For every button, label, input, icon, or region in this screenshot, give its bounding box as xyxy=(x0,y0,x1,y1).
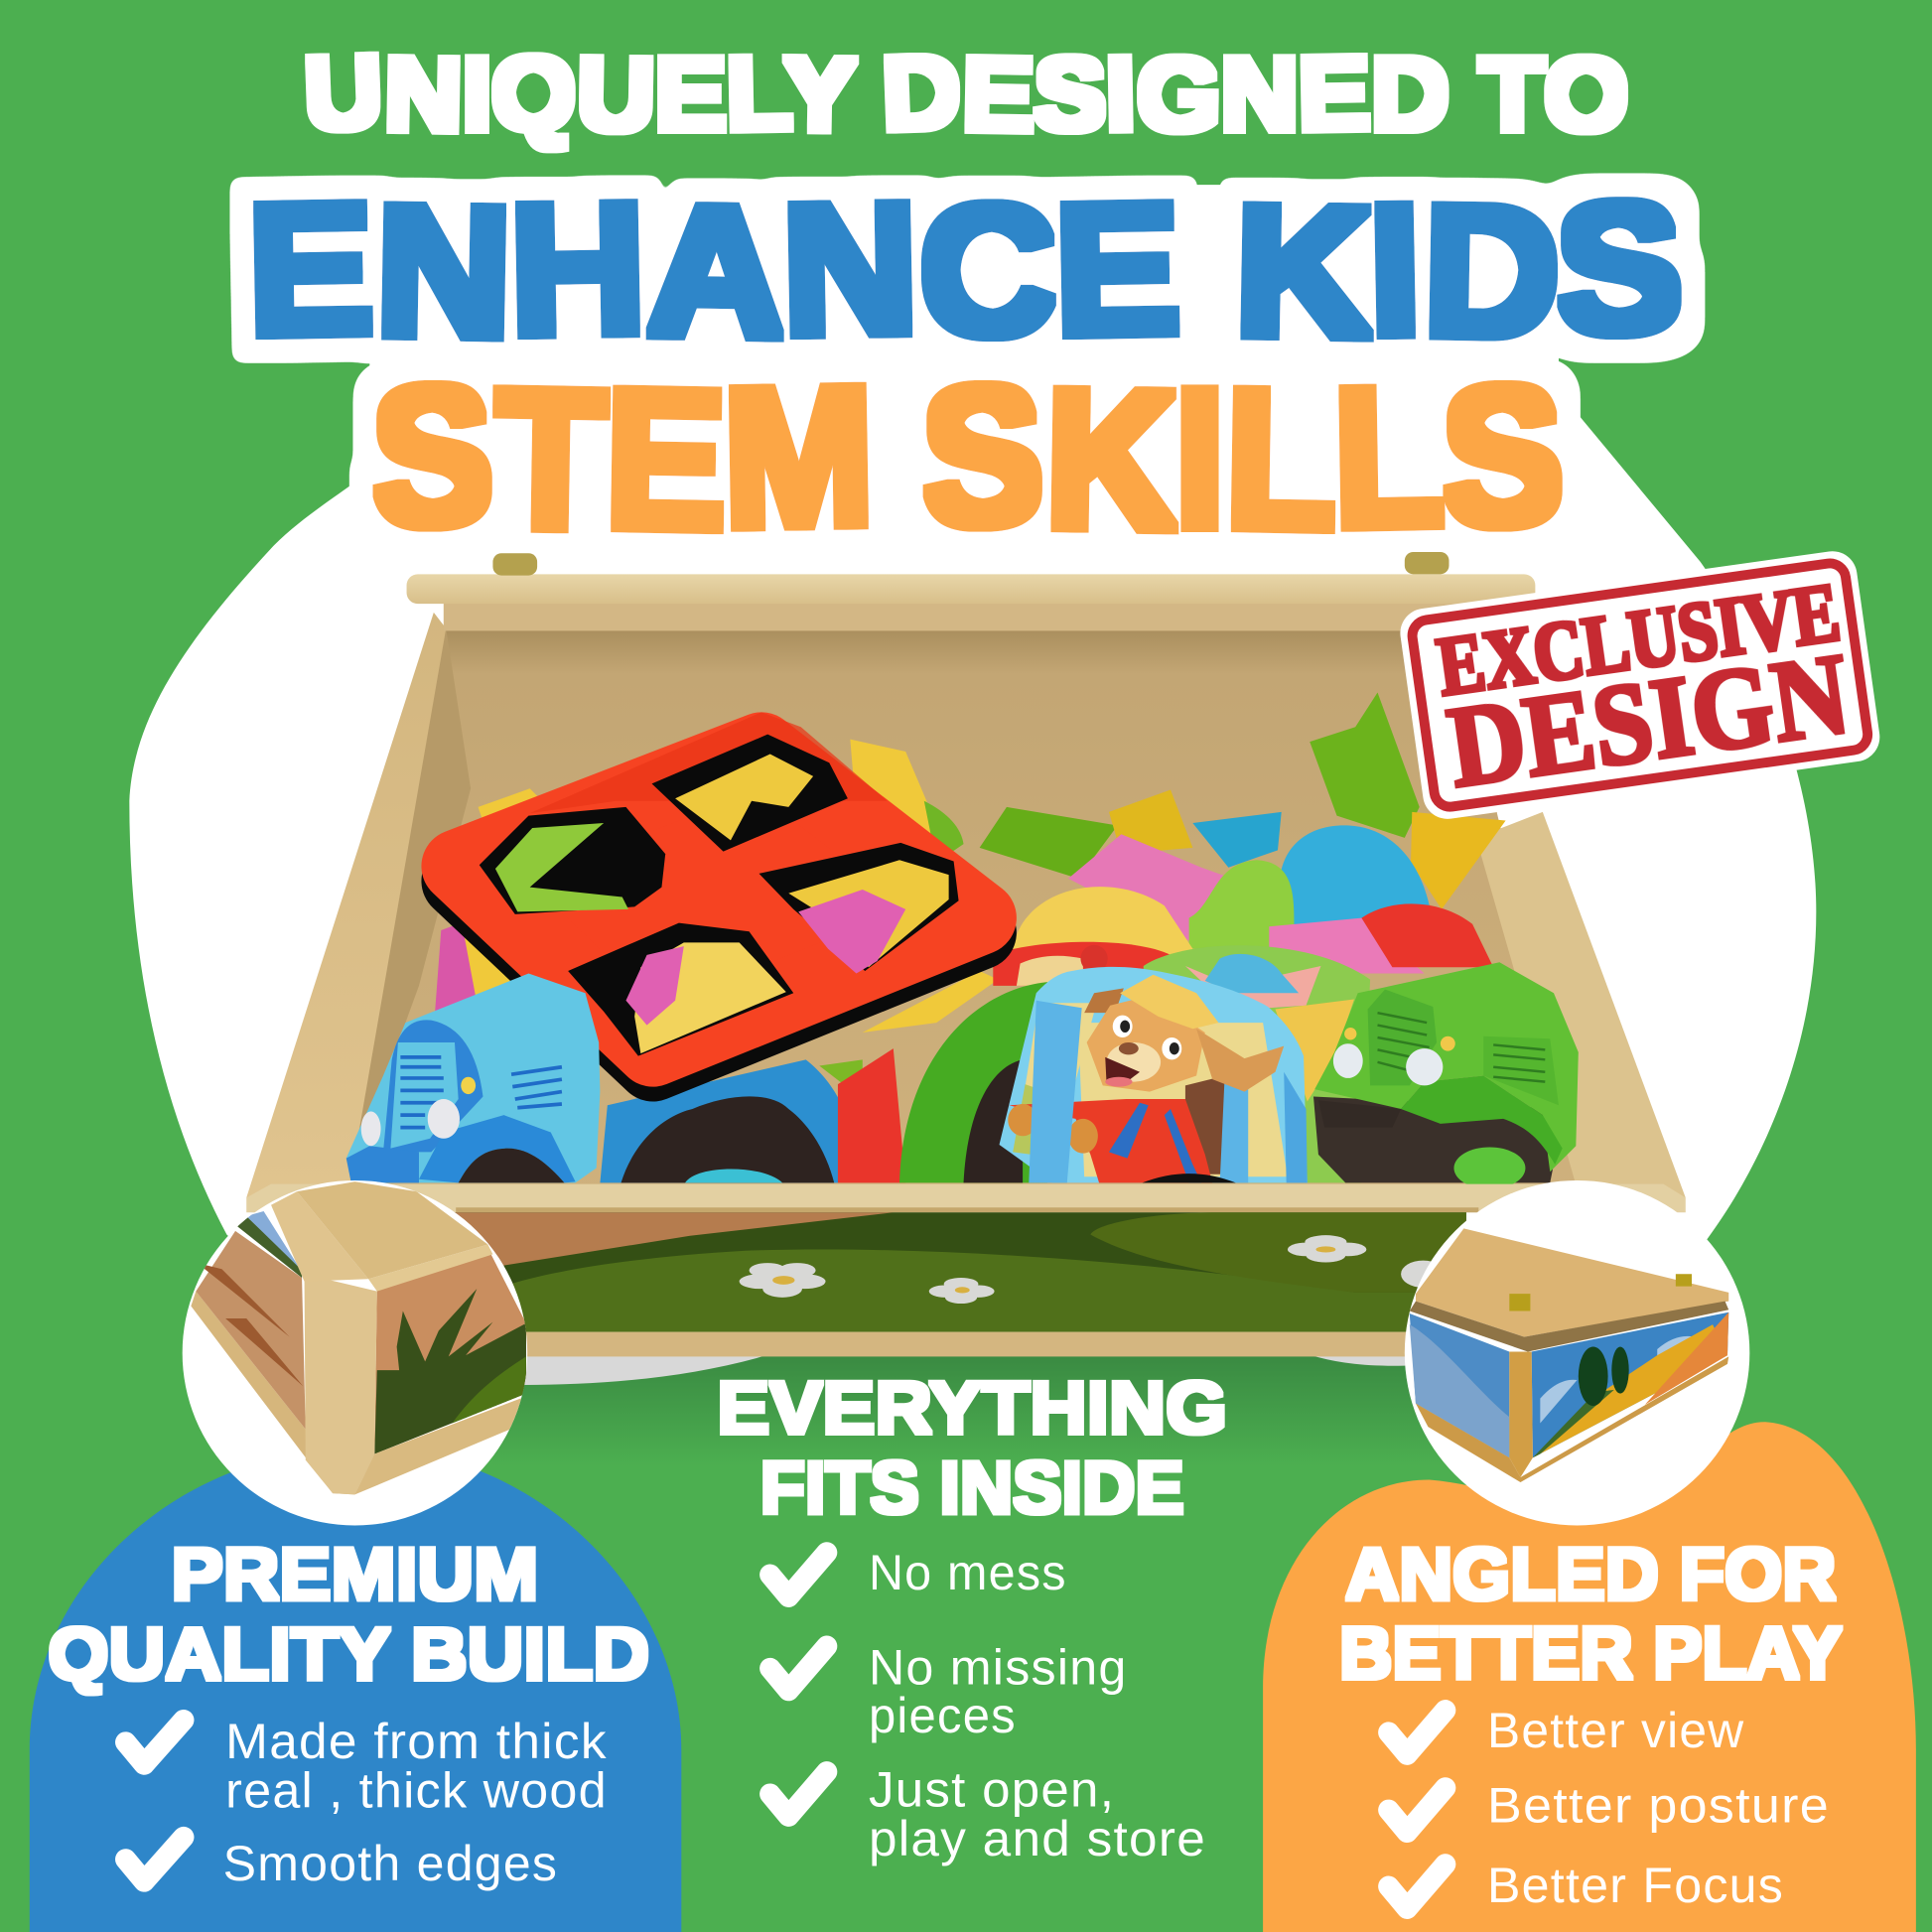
left wood edge xyxy=(191,1292,374,1494)
hole top inner xyxy=(675,755,813,840)
dog pupils xyxy=(1120,1021,1179,1054)
tire xyxy=(621,1096,834,1182)
list: angled for better play xyxy=(1389,1703,1830,1913)
dog head xyxy=(1087,996,1205,1092)
yellow lights xyxy=(1344,1028,1455,1051)
heading: everything fits inside: FITS INSIDE xyxy=(760,1447,1184,1529)
left face streaks xyxy=(198,1263,303,1386)
wood column xyxy=(305,1274,377,1494)
sky blue blob xyxy=(1279,825,1432,936)
dog tongue xyxy=(1105,1077,1133,1087)
blue panel xyxy=(30,1448,681,1932)
right grille xyxy=(1483,1036,1559,1105)
stamp: exclusive design xyxy=(1397,548,1883,822)
dog nose xyxy=(1119,1042,1139,1054)
green truck centre xyxy=(899,982,1047,1182)
lid xyxy=(407,574,1535,604)
list: everything fits inside: play and store xyxy=(869,1811,1206,1866)
blue piece xyxy=(1192,812,1282,868)
right face sky xyxy=(1532,1312,1728,1457)
red body xyxy=(838,1048,905,1182)
big green star xyxy=(1310,692,1420,838)
dark mudguard xyxy=(1318,1100,1401,1128)
hole left xyxy=(480,807,665,914)
yellow behind tray xyxy=(850,740,936,888)
dog hat xyxy=(1120,975,1218,1029)
grille surround xyxy=(383,1020,483,1152)
landscape hill xyxy=(499,1249,1466,1332)
green square xyxy=(980,807,1118,879)
corner detail xyxy=(191,1181,526,1494)
list: premium quality build: Made from thick xyxy=(225,1714,608,1769)
red window xyxy=(1017,956,1083,986)
heading: premium quality build xyxy=(48,1533,649,1696)
seat xyxy=(1185,1075,1225,1174)
yellow piece under tray xyxy=(863,971,998,1033)
grille xyxy=(390,1042,459,1149)
pig panel xyxy=(1144,945,1370,1182)
base xyxy=(1416,1356,1728,1482)
cab xyxy=(346,973,600,1182)
landscape brown xyxy=(444,1212,894,1307)
heading: angled for better play: ANGLED FOR xyxy=(1345,1533,1836,1615)
lid strip xyxy=(444,602,1484,630)
heading: everything fits inside: EVERYTHING xyxy=(717,1366,1227,1449)
yellow top left behind tray xyxy=(479,788,554,850)
list: everything fits inside: pieces xyxy=(869,1688,1017,1743)
mini box xyxy=(1410,1228,1728,1482)
title line 3: STEM SKILLS xyxy=(368,345,1567,571)
heading: angled for better play xyxy=(1339,1533,1842,1694)
orange panel xyxy=(1263,1422,1916,1932)
headlights xyxy=(1333,1043,1443,1085)
blue truck cab xyxy=(346,973,600,1182)
left side wall xyxy=(246,613,446,1197)
rail shadow line xyxy=(456,1207,1478,1212)
dog right ear xyxy=(1196,1029,1284,1092)
heading: angled for better play: BETTER PLAY xyxy=(1339,1611,1842,1694)
list: everything fits inside: Just open, xyxy=(869,1761,1115,1817)
tray shadow xyxy=(459,763,980,1064)
stamp text bottom: DESIGN xyxy=(1441,629,1857,812)
slivers at left xyxy=(434,918,505,1035)
blue corner xyxy=(246,1211,300,1268)
headlights xyxy=(361,1099,460,1146)
red shape-sorter tray xyxy=(459,712,980,1064)
front top rail xyxy=(246,1184,1686,1212)
paws xyxy=(1008,1104,1098,1154)
lane xyxy=(1533,1390,1614,1457)
title line 2: ENHANCE KIDS xyxy=(246,163,1686,376)
dog mouth xyxy=(1105,1057,1140,1084)
hole right xyxy=(759,843,959,971)
wooden box xyxy=(246,574,1686,1201)
red piece xyxy=(1361,903,1493,967)
bottom rail xyxy=(308,1332,1442,1356)
tray face xyxy=(459,750,980,1049)
stamp border xyxy=(1411,561,1869,809)
flower 3 xyxy=(1288,1235,1366,1262)
flower 2 xyxy=(929,1278,995,1304)
pegs xyxy=(1509,1274,1692,1311)
right grille lines xyxy=(1493,1044,1545,1082)
rear fender xyxy=(600,1059,848,1182)
stamp text top: EXCLUSIVE xyxy=(1433,567,1846,714)
hill left xyxy=(1013,1084,1059,1159)
red truck xyxy=(838,942,1171,1182)
left wall shade xyxy=(345,628,471,1189)
white backdrop blob xyxy=(129,369,1816,1368)
dog eyes xyxy=(1113,1016,1181,1059)
grille lines xyxy=(400,1057,444,1128)
flower 1 xyxy=(740,1263,826,1298)
stamp white xyxy=(1397,548,1883,822)
dark green stripe xyxy=(235,1216,302,1278)
left brown face xyxy=(196,1231,306,1430)
list: angled for better play: Better posture xyxy=(1487,1778,1830,1834)
frame outer right xyxy=(1284,1072,1308,1182)
left face sky xyxy=(1410,1313,1509,1457)
inset circle left xyxy=(183,1180,527,1525)
list: premium quality build xyxy=(126,1714,608,1891)
frame xyxy=(1509,1351,1533,1477)
red top xyxy=(993,942,1171,986)
right brown face xyxy=(374,1248,526,1453)
landscape oval xyxy=(1090,1212,1466,1293)
cloud xyxy=(1540,1336,1694,1423)
box front edge and landscape panel xyxy=(246,1184,1686,1356)
toy pieces in box xyxy=(346,692,1579,1189)
heading: premium quality build: QUALITY BUILD xyxy=(48,1613,649,1696)
hen comb xyxy=(1080,945,1108,972)
tire xyxy=(1313,1097,1565,1182)
hub xyxy=(685,1169,782,1182)
lid top xyxy=(1416,1228,1728,1337)
right grille lines xyxy=(511,1067,562,1108)
yellow panel xyxy=(1276,1000,1354,1102)
fender xyxy=(419,1115,576,1182)
yellow ring xyxy=(1013,887,1192,980)
list: everything fits inside xyxy=(770,1545,1206,1866)
body xyxy=(1314,962,1579,1172)
hole top xyxy=(652,735,848,852)
hub xyxy=(1453,1147,1525,1189)
white floor glow xyxy=(523,1355,1417,1385)
landscape dark green xyxy=(444,1212,1466,1332)
list: angled for better play: Better view xyxy=(1487,1703,1744,1758)
grille lines xyxy=(1378,1013,1430,1072)
tray top shade xyxy=(530,712,888,813)
flower 4 xyxy=(1401,1261,1446,1288)
tree xyxy=(1611,1346,1629,1394)
yellow sliver xyxy=(462,918,523,1023)
hole left inner xyxy=(495,823,628,911)
trees xyxy=(1579,1346,1608,1406)
title backing xyxy=(265,185,1657,407)
green behind tray xyxy=(924,801,964,863)
wood rim xyxy=(368,1244,492,1292)
lid peg right xyxy=(1405,552,1449,574)
yellow diamond xyxy=(1109,790,1192,854)
bumper xyxy=(346,1146,419,1182)
floor shadow xyxy=(492,1355,1442,1466)
window centre xyxy=(1078,1023,1288,1176)
pink piece xyxy=(1269,918,1425,973)
left bevel xyxy=(271,1191,368,1282)
hole bottom inner xyxy=(634,942,786,1053)
overall straps xyxy=(1109,1103,1201,1182)
pink star xyxy=(1068,834,1232,942)
right side wall xyxy=(1476,812,1686,1197)
pig face xyxy=(1185,966,1320,1011)
shirt xyxy=(1009,1099,1212,1182)
field orange xyxy=(1645,1312,1728,1405)
green truck right xyxy=(1313,962,1579,1189)
dog muzzle xyxy=(1106,1042,1161,1082)
dog panel xyxy=(1000,967,1308,1182)
yellow light xyxy=(461,1077,476,1094)
list: angled for better play: Better Focus xyxy=(1487,1858,1784,1913)
frame left xyxy=(1029,1001,1082,1182)
fender xyxy=(1401,1075,1563,1165)
list: everything fits inside: No mess xyxy=(869,1545,1067,1600)
hole right pink xyxy=(798,890,905,973)
wood base xyxy=(354,1397,523,1494)
front tire xyxy=(459,1149,564,1182)
inset circle right xyxy=(1405,1180,1749,1525)
heading: premium quality build: PREMIUM xyxy=(172,1533,538,1615)
hole right inner xyxy=(788,860,949,967)
hole bottom xyxy=(568,923,793,1056)
grass xyxy=(374,1289,526,1453)
centre wheel xyxy=(964,1059,1023,1182)
heading: everything fits inside xyxy=(717,1366,1227,1529)
back wall xyxy=(345,628,1589,1201)
panel sky xyxy=(1000,967,1308,1182)
yellow triangle xyxy=(1411,812,1506,909)
list: everything fits inside: No missing xyxy=(869,1640,1128,1696)
green piece under tray xyxy=(819,1059,863,1099)
pig hat xyxy=(1205,954,1299,993)
lid shadow xyxy=(1410,1302,1728,1351)
lid peg left xyxy=(492,553,537,576)
window left xyxy=(1017,1003,1097,1140)
rear wheel of blue truck xyxy=(600,1059,848,1182)
list: premium quality build: real , thick wood xyxy=(225,1763,608,1819)
left cloud xyxy=(1410,1324,1509,1457)
light green blob xyxy=(1189,860,1294,949)
grille xyxy=(1368,990,1437,1085)
dog left ear xyxy=(1084,988,1124,1013)
wheel below xyxy=(1142,1173,1236,1182)
list: premium quality build: Smooth edges xyxy=(223,1836,558,1891)
wood top xyxy=(297,1181,487,1279)
title line 1: UNIQUELY DESIGNED TO xyxy=(303,35,1629,154)
field yellow xyxy=(1533,1324,1727,1457)
hole bottom pink xyxy=(625,946,684,1026)
frame right xyxy=(1220,1075,1248,1182)
light grass xyxy=(452,1356,526,1423)
